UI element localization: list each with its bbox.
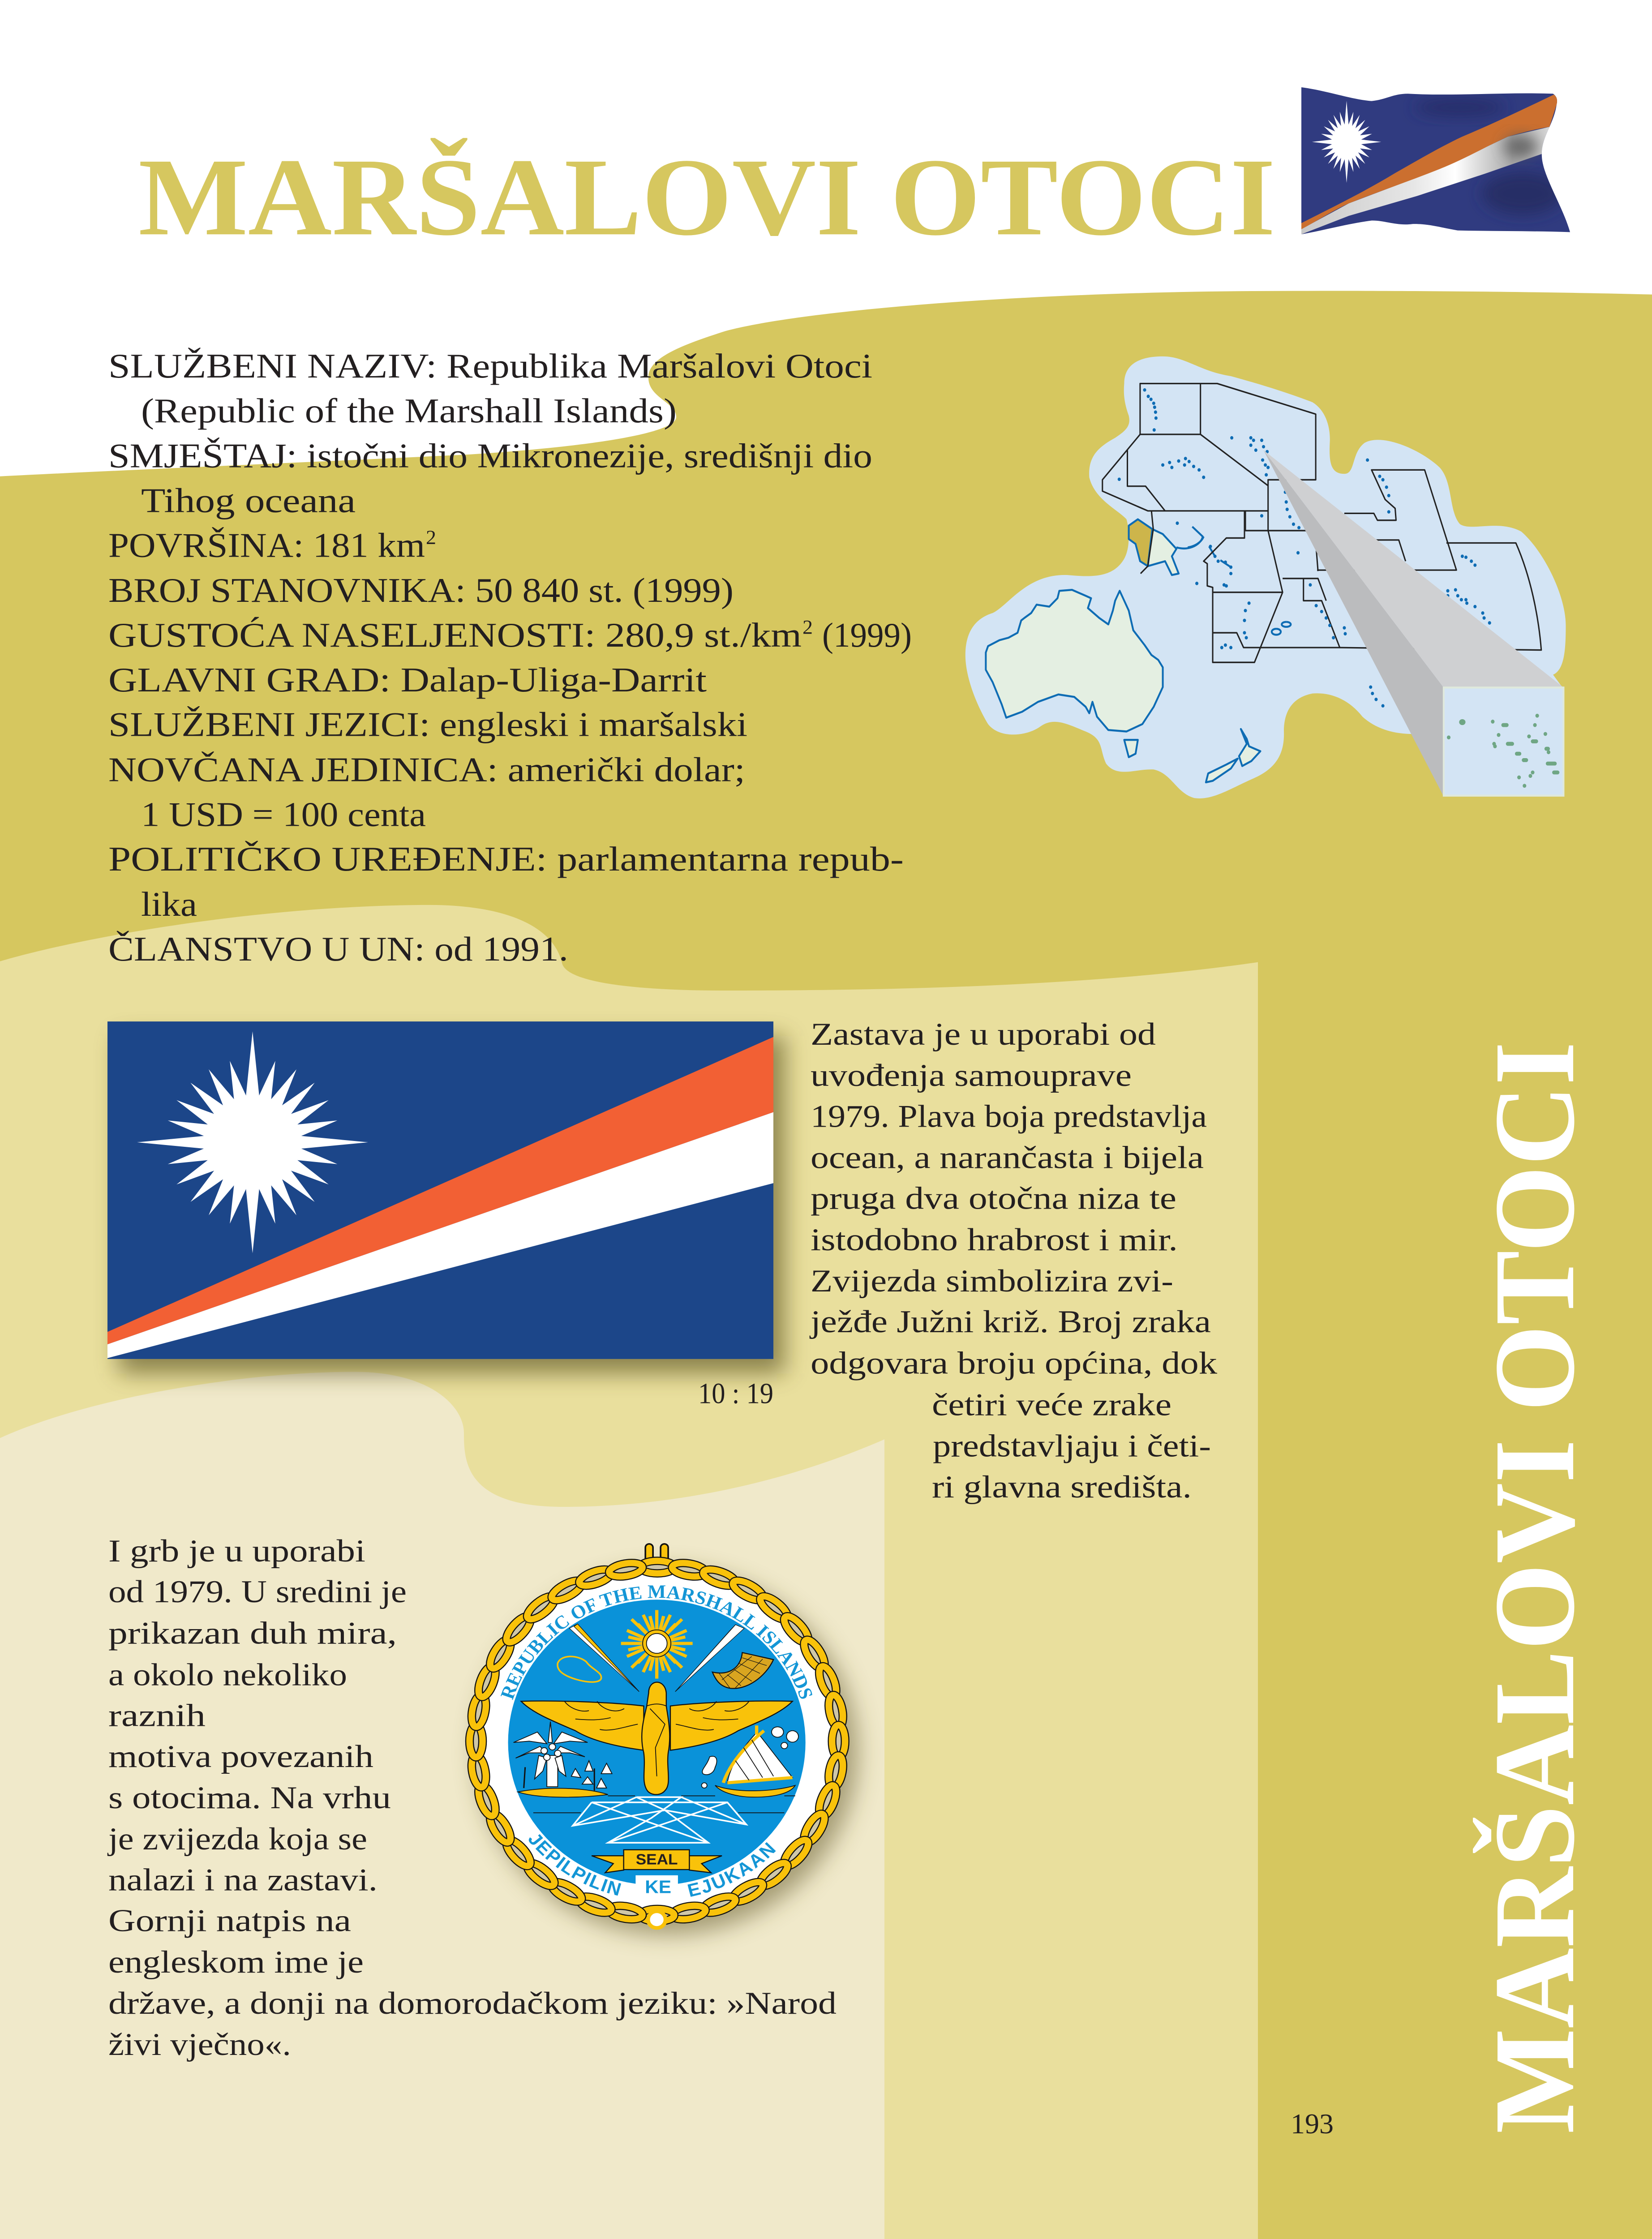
seal: sun (621, 1610, 693, 1679)
fact: official name in English: (Republic of the Marshall Islands) (141, 391, 677, 429)
text block: flag description: ježđe Južni križ. Broj zraka (809, 1304, 1211, 1339)
text block: coat of arms description: s otocima. Na vrhu (108, 1780, 391, 1815)
map: inset of the Marshall Islands (1444, 687, 1563, 796)
seal: spirit of peace with wings (521, 1682, 793, 1794)
fact: political system continued: lika (141, 885, 197, 923)
seal: bottom chain link (648, 1911, 665, 1928)
map: landmasses (986, 519, 1291, 782)
seal: canoe with sail (702, 1725, 798, 1797)
seal: navigation chart (573, 1797, 747, 1843)
text block: flag description: ocean, a narančasta i bijela (811, 1140, 1204, 1175)
text block: flag description: uvođenja samouprave (811, 1057, 1132, 1093)
text block: coat of arms description: je zvijezda koja se (107, 1821, 367, 1857)
text block: flag description: odgovara broju općina, dok (811, 1345, 1218, 1381)
title: MARŠALOVI OTOCI (138, 136, 1275, 258)
text block: country facts (108, 347, 912, 968)
coat of arms shadow (477, 1569, 858, 1934)
national flag (107, 1021, 773, 1359)
seal: upper inscription: REPUBLIC OF THE MARSHALL ISLANDS (497, 1582, 817, 1702)
seal: island outline (558, 1656, 601, 1682)
text block: flag description: pruga dva otočna niza te (811, 1180, 1176, 1216)
flag proportion caption: 10 : 19 (698, 1378, 773, 1410)
seal: SEAL banner (592, 1850, 722, 1873)
seal: lower inscription left: JEPILPILIN (524, 1829, 625, 1900)
fact: official name: SLUŽBENI NAZIV: Republika Maršalovi Otoci (108, 347, 872, 385)
seal: hook at the top of the chain (649, 1548, 665, 1570)
superscript: 2 (802, 616, 813, 638)
seal: white ring (482, 1573, 832, 1909)
seal: lower inscription right: EJUKAAN (685, 1837, 781, 1901)
text block: coat of arms description (107, 1533, 837, 2062)
seal: KE label (635, 1875, 678, 1897)
text block: coat of arms description: a okolo nekoliko (108, 1657, 347, 1692)
seal: upper inscription (497, 1582, 817, 1814)
text block: flag description (809, 1016, 1218, 1505)
fact: density year: (1999) (822, 616, 912, 654)
icon: flag star with 24 rays (137, 1031, 368, 1253)
seal: island with palm tree (514, 1722, 612, 1797)
icon: waving flag star (1312, 101, 1381, 183)
seal: chain border (455, 1547, 860, 1936)
vertical side title: MARŠALOVI OTOCI (1470, 1042, 1598, 2134)
fact: languages: SLUŽBENI JEZICI: engleski i maršalski (108, 705, 747, 743)
coat of arms (455, 1547, 860, 1936)
text block: flag description: četiri veće zrake (932, 1387, 1171, 1422)
text block: coat of arms description: države, a donji na domorodačkom jeziku: »Narod (108, 1985, 837, 2021)
seal: spears (569, 1624, 744, 1692)
text block: coat of arms description: raznih (108, 1698, 206, 1733)
fact: location: SMJEŠTAJ: istočni dio Mikronezije, središnji dio (108, 437, 872, 475)
map: grey projection wedge (1264, 450, 1563, 796)
fact: capital: GLAVNI GRAD: Dalap-Uliga-Darrit (108, 661, 707, 699)
fact: population: BROJ STANOVNIKA: 50 840 st. (1999) (108, 571, 734, 609)
text block: coat of arms description: živi vječno«. (108, 2026, 291, 2062)
text block: coat of arms description: od 1979. U sredini je (108, 1574, 407, 1609)
text block: coat of arms description: motiva povezanih (108, 1738, 373, 1774)
text block: flag description: predstavljaju i četi- (933, 1428, 1211, 1463)
superscript: 2 (426, 526, 436, 548)
seal: blue field (508, 1600, 806, 1885)
fact: area: POVRŠINA: 181 km (108, 526, 425, 564)
fact: location continued: Tihog oceana (141, 481, 356, 519)
seal: fishing net (712, 1652, 773, 1689)
text block: coat of arms description: Gornji natpis na (108, 1903, 351, 1938)
panel: light cream background (0, 1372, 884, 2239)
page number: 193 (1291, 2108, 1334, 2140)
panel: medium yellow background (0, 905, 1258, 2239)
map: territorial borders (1103, 383, 1541, 662)
map: ocean area (965, 356, 1566, 798)
text block: flag description: 1979. Plava boja predstavlja (811, 1098, 1207, 1134)
flag shadow (119, 1036, 785, 1373)
text block: flag description: ri glavna središta. (932, 1469, 1192, 1505)
seal: SEAL banner: SEAL (636, 1851, 678, 1868)
icon: waving flag (1299, 86, 1576, 236)
fact: currency rate: 1 USD = 100 centa (141, 795, 426, 833)
fact: UN membership: ČLANSTVO U UN: od 1991. (108, 930, 568, 968)
fact: political system: POLITIČKO UREĐENJE: parlamentarna repub- (108, 840, 904, 878)
map: Oceania locator (965, 356, 1566, 798)
text block: coat of arms description: I grb je u uporabi (108, 1533, 365, 1569)
fact: density: GUSTOĆA NASELJENOSTI: 280,9 st./km (108, 616, 802, 654)
text block: flag description: Zastava je u uporabi od (811, 1016, 1156, 1052)
seal: KE label: KE (645, 1876, 671, 1897)
fact: currency: NOVČANA JEDINICA: američki dolar; (108, 751, 745, 789)
text block: flag description: Zvijezda simbolizira zvi- (811, 1263, 1173, 1299)
seal: sea waves (533, 1796, 795, 1813)
map: small islands (1119, 390, 1489, 706)
text block: flag description: istodobno hrabrost i mir. (811, 1222, 1178, 1257)
text block: coat of arms description: nalazi i na zastavi. (108, 1862, 378, 1897)
text block: coat of arms description: engleskom ime je (108, 1944, 364, 1979)
text block: coat of arms description: prikazan duh mira, (108, 1615, 397, 1651)
